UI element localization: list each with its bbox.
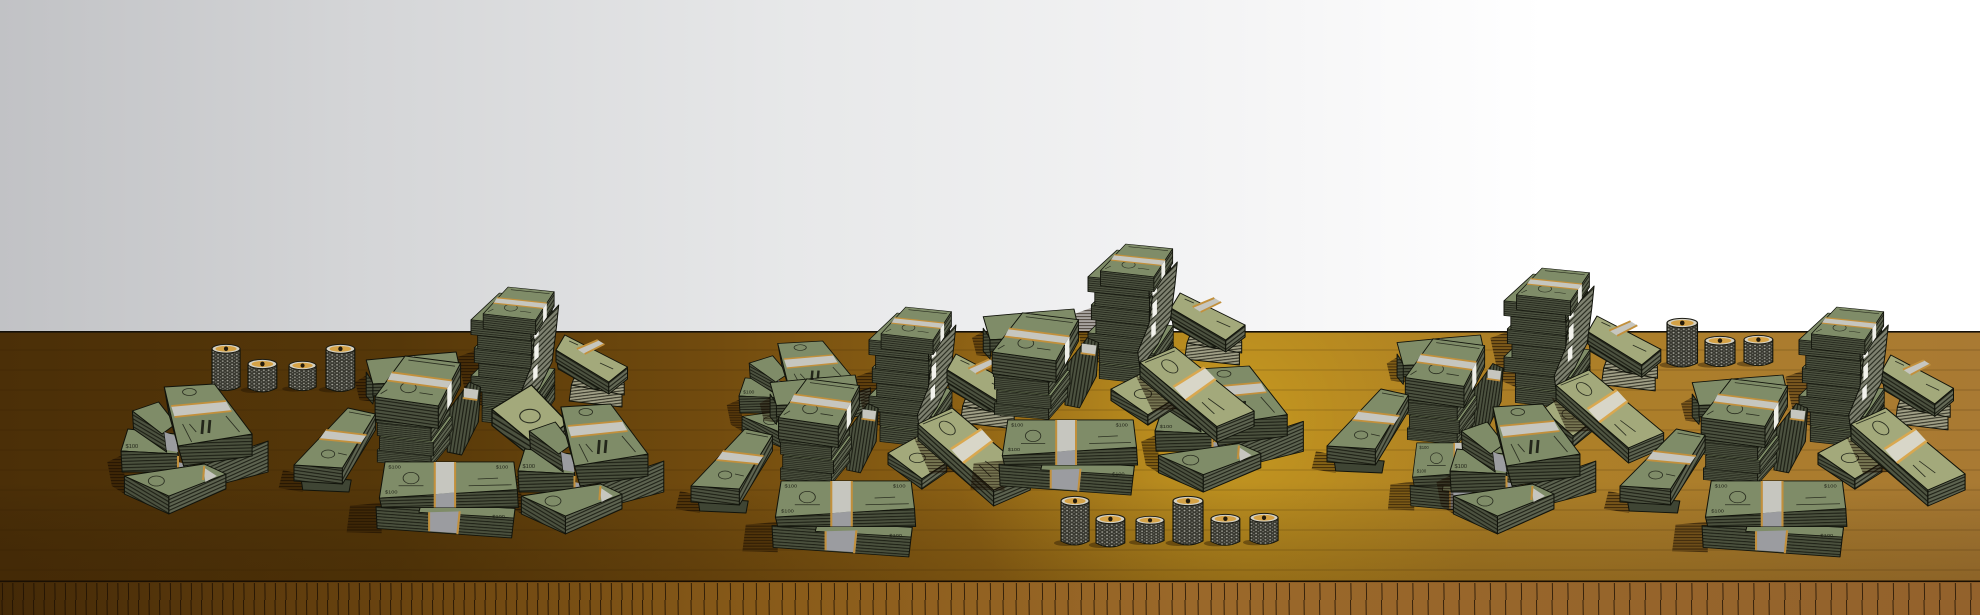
flat bundle behind pile (1388, 443, 1517, 515)
side stack (1171, 293, 1245, 365)
back bundle (1111, 372, 1175, 425)
tall tower of bundles (1490, 268, 1594, 409)
flat double bundle (347, 462, 518, 538)
coin stack 3 (1129, 516, 1164, 545)
money pile: far left (107, 384, 268, 514)
money group: far right (1604, 307, 1965, 557)
tilted long bundle (913, 408, 1030, 506)
medium stack (972, 309, 1099, 419)
tilted long bundle (1551, 370, 1664, 463)
coin stack 4 (1166, 496, 1203, 546)
coin stack 6 (1243, 513, 1278, 545)
coin stack 1 (1054, 496, 1089, 546)
back bundle (888, 436, 947, 489)
slanted bundles (1604, 429, 1705, 513)
back bundles (492, 385, 568, 461)
back pile (727, 341, 871, 448)
pile of bundles (504, 404, 664, 534)
coin stack 2 (1089, 514, 1125, 548)
coin stack 4 (319, 344, 355, 392)
tilted long bundle (1135, 347, 1254, 442)
flat double bundle (742, 481, 916, 557)
medium stack (1681, 375, 1808, 484)
money group: second from left (279, 287, 664, 538)
flat double bundle (970, 420, 1138, 495)
pile of bundles (1436, 404, 1596, 534)
coin stacks: left group (205, 344, 355, 393)
tall tower of bundles (458, 287, 559, 428)
money group: centre left (676, 307, 1030, 557)
money group: right of centre (1312, 268, 1664, 534)
pile of bundles (1141, 366, 1303, 492)
back bundle (1818, 436, 1882, 489)
coin stack 3 (282, 361, 316, 392)
coin stacks: centre group (1054, 496, 1278, 548)
table skirt with vertical boards (0, 580, 1980, 615)
side stack (556, 335, 628, 407)
coin stack 2 (241, 359, 277, 393)
table top (0, 331, 1980, 581)
money group: centre (970, 244, 1303, 495)
tall tower of bundles (1074, 244, 1177, 385)
coin stack 2 (1698, 336, 1735, 368)
medium stack (355, 352, 481, 467)
coin stack 3 (1737, 335, 1773, 367)
tall tower of bundles (1785, 307, 1888, 448)
coin stacks: right group (1659, 318, 1773, 368)
side stack (1588, 316, 1661, 391)
back bundle (1543, 391, 1595, 447)
tilted long bundle (1846, 408, 1965, 506)
coin stack 5 (1204, 514, 1240, 546)
coin stack 1 (1659, 318, 1697, 368)
flat double bundle (1672, 481, 1847, 557)
medium stack (760, 375, 878, 484)
side stack (947, 354, 1020, 429)
slanted bundles (1312, 389, 1408, 473)
medium stack (1387, 335, 1503, 444)
slanted bundles (676, 429, 772, 513)
tall tower of bundles (856, 307, 956, 448)
background wall (0, 0, 1980, 332)
coin stack 1 (205, 344, 240, 392)
slanted bundles (279, 408, 375, 492)
side stack (1882, 355, 1954, 430)
